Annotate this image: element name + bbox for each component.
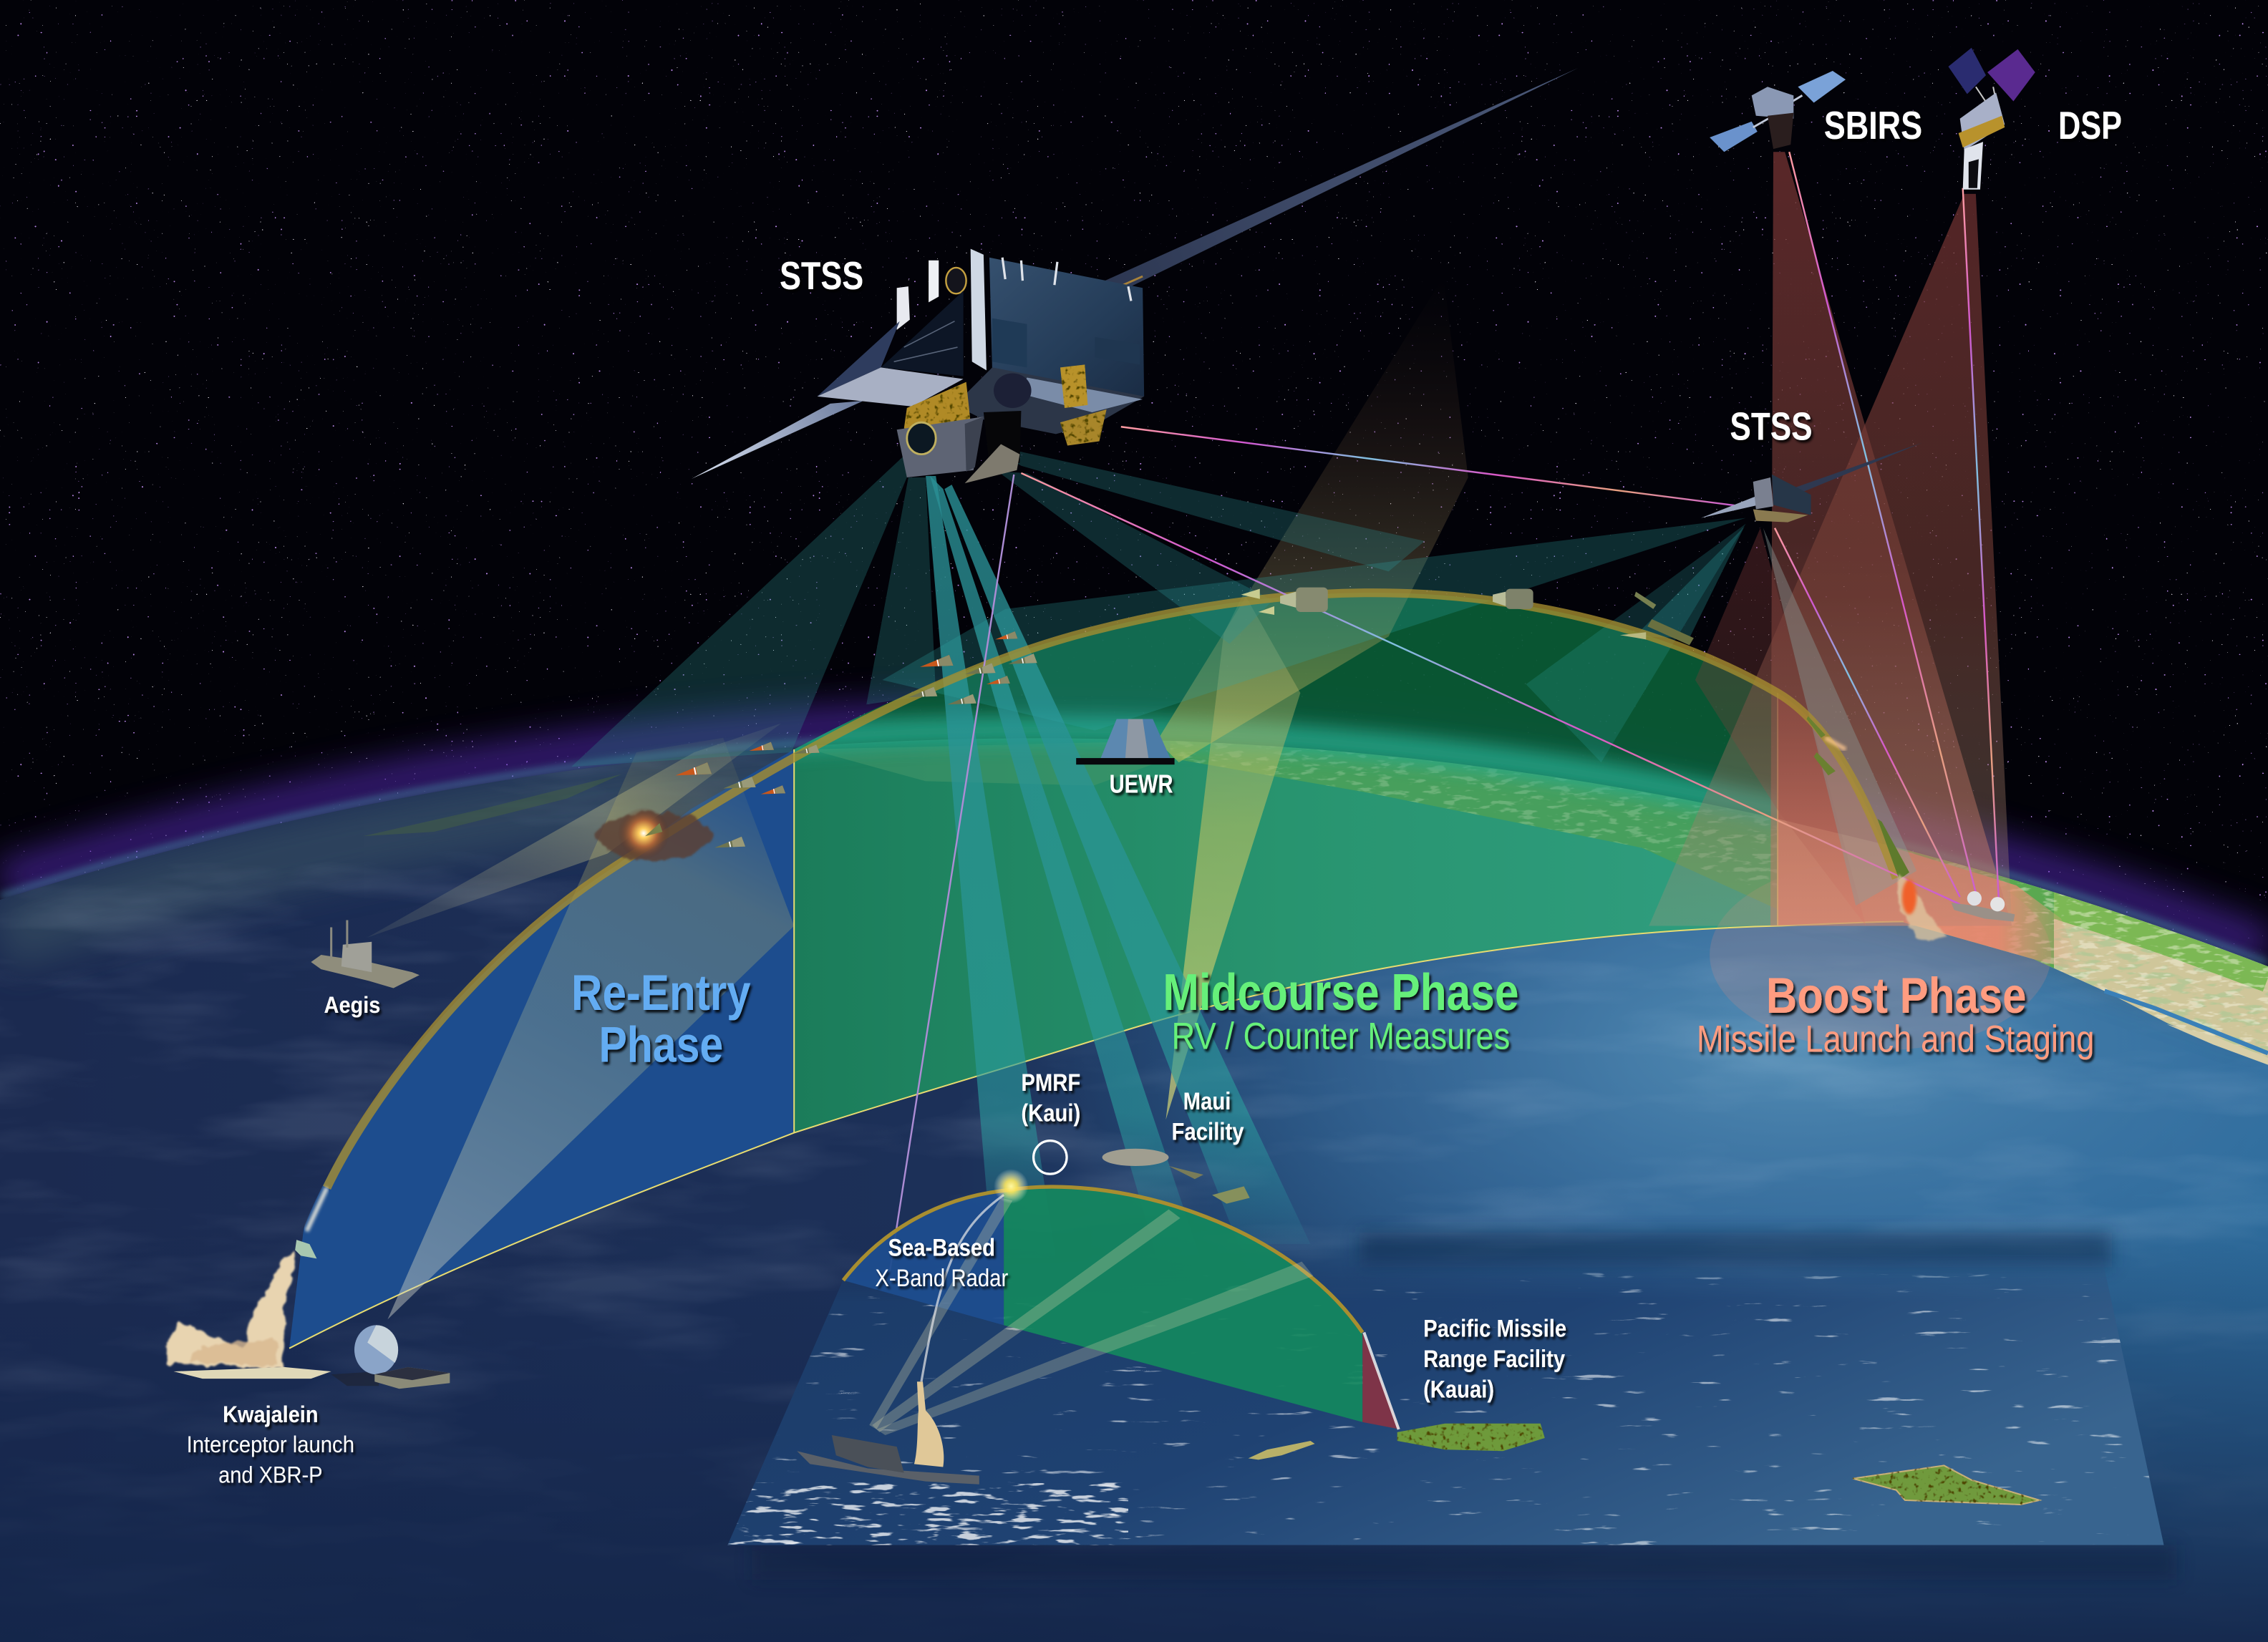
label: PMRF: PMRF <box>1021 1069 1080 1097</box>
sensor beams: red infrared <box>1649 152 2012 926</box>
satellite: small STSS <box>1701 442 1922 523</box>
label: Aegis: Aegis <box>324 992 380 1018</box>
midcourse phase panel <box>795 593 1777 1132</box>
inset: Kauai island <box>1397 1424 1545 1451</box>
label: UEWR: UEWR <box>1110 769 1173 799</box>
heading: Re-Entry Phase <box>571 964 751 1073</box>
warheads and decoys <box>676 631 1037 847</box>
land seen through midcourse panel <box>818 742 1777 909</box>
inset: Oahu island <box>1853 1465 2040 1505</box>
inset: Aegis ship with launch plume <box>797 1381 979 1485</box>
label: Maui Facility: Maui <box>1183 1088 1231 1115</box>
heading: Re-Entry Phase: Re-Entry <box>571 964 751 1021</box>
label: Pacific Missile Range Facility: Range Facility <box>1423 1346 1565 1373</box>
label: Kwajalein: and XBR-P <box>218 1462 323 1488</box>
UEWR radar <box>1076 719 1175 764</box>
communication links <box>890 152 1999 1273</box>
intercept explosion <box>596 807 712 861</box>
inset: trajectory arc <box>843 1187 1362 1332</box>
sensor beams: teal tracking from STSS <box>571 444 1916 1258</box>
label: Sea-Based X-Band Radar <box>875 1234 1008 1292</box>
satellite: SBIRS <box>1710 71 1846 152</box>
heading: Midcourse Phase: RV / Counter Measures <box>1172 1015 1510 1057</box>
inset: red launch zone <box>1362 1332 1400 1429</box>
label: STSS large: STSS <box>780 254 863 298</box>
inset: Niihau island <box>1249 1441 1315 1459</box>
heading: Boost Phase <box>1697 967 2095 1060</box>
label: Kwajalein: Interceptor launch <box>187 1432 354 1457</box>
label: Sea-Based X-Band Radar: X-Band Radar <box>875 1265 1008 1292</box>
Kwajalein launch site with dome and plume <box>165 1187 450 1389</box>
earth globe <box>0 694 2268 1642</box>
label: SBIRS: SBIRS <box>1824 104 1922 147</box>
heading: Boost Phase: Boost Phase <box>1766 967 2027 1024</box>
label: PMRF: (Kaui) <box>1021 1099 1080 1127</box>
inset: green midcourse zone <box>1004 1187 1362 1422</box>
heading: Midcourse Phase <box>1163 963 1518 1057</box>
label: Kwajalein <box>187 1401 354 1488</box>
boost phase ground glow <box>1710 819 2083 1050</box>
label: PMRF <box>1021 1069 1080 1127</box>
background: space with stars <box>0 0 2268 1013</box>
inset: sensor beams from ship <box>869 1195 1314 1435</box>
heading: Boost Phase: Missile Launch and Staging <box>1697 1018 2095 1060</box>
distant land at left <box>363 774 622 836</box>
boost phase panel <box>1778 693 1945 926</box>
Aegis cruiser <box>311 920 420 988</box>
satellite: DSP <box>1948 48 2035 190</box>
Baja California and gulf <box>2105 991 2268 1065</box>
inset: blue interceptor zone <box>843 1190 1004 1325</box>
launch site <box>1952 891 2015 921</box>
label: Sea-Based X-Band Radar: Sea-Based <box>888 1234 995 1261</box>
inset: Hawaii test range photo <box>723 1141 2177 1580</box>
interceptor and missile trajectory <box>327 593 1896 1187</box>
heading: Re-Entry Phase: Phase <box>598 1016 723 1073</box>
satellite: large STSS <box>692 68 1578 483</box>
label: Kwajalein: Kwajalein <box>223 1401 318 1427</box>
label: Maui Facility <box>1172 1088 1244 1146</box>
label: Maui Facility: Facility <box>1172 1119 1244 1146</box>
inset: intercept flash <box>994 1169 1029 1204</box>
heading: Midcourse Phase: Midcourse Phase <box>1163 963 1518 1021</box>
atmosphere glow <box>0 721 2268 963</box>
re-entry phase panel <box>289 749 794 1349</box>
sensor beams: tan UEWR <box>1157 276 1468 1119</box>
label: STSS small: STSS <box>1730 404 1813 448</box>
land strip: North America <box>1896 847 2268 1058</box>
label: Pacific Missile Range Facility: (Kauai) <box>1423 1376 1494 1403</box>
sensor beams: Aegis and XBR <box>367 724 794 1319</box>
label: Pacific Missile Range Facility <box>1423 1316 1566 1403</box>
inset: Maui facility <box>1102 1149 1250 1204</box>
midcourse objects: boosters and warheads <box>1241 588 1694 645</box>
label: Pacific Missile Range Facility: Pacific Missile <box>1423 1316 1566 1343</box>
label: DSP: DSP <box>2058 104 2122 147</box>
panel edge lines <box>289 693 1904 1349</box>
boost stages and missile <box>1806 716 1945 941</box>
inset: target missile trail <box>1364 1332 1399 1429</box>
inset: PMRF marker circle <box>1034 1141 1067 1174</box>
